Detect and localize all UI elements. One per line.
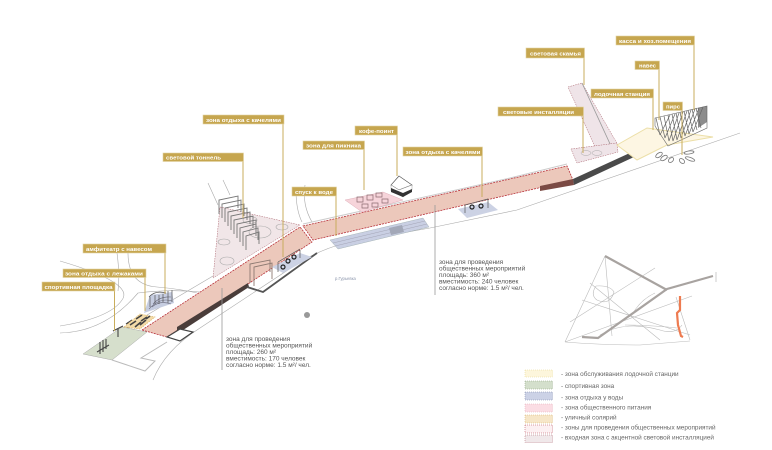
dark walkway to boat station bbox=[540, 152, 634, 191]
legend item: entrance bbox=[525, 434, 714, 442]
label: canopy bbox=[635, 61, 660, 120]
label: coffee point: кофе-поинт bbox=[359, 128, 394, 135]
label: light installations: световые инсталляции bbox=[503, 110, 574, 116]
callout: events zone 360 bbox=[435, 205, 526, 295]
legend item: sports bbox=[525, 381, 615, 390]
zone: solarium with loungers bbox=[124, 314, 155, 329]
label: amphitheatre: амфитеатр с навесом bbox=[86, 246, 152, 253]
callout: events zone 360: площадь: 360 м² bbox=[439, 272, 490, 279]
dark wall with swing platform bbox=[247, 249, 317, 292]
label: descent to water bbox=[292, 187, 336, 236]
upper edge of promenade bbox=[303, 164, 567, 224]
callout: events zone 260: вместимость: 170 человек bbox=[226, 356, 306, 362]
legend item: catering bbox=[525, 404, 652, 412]
icon: canopy and pier structure bbox=[655, 106, 707, 146]
light bench zone bbox=[568, 83, 618, 163]
label: descent to water: спуск к воде bbox=[295, 190, 334, 196]
minimap bbox=[565, 256, 716, 345]
icon: boats bbox=[655, 150, 695, 164]
label: sports ground bbox=[42, 282, 115, 331]
callout: events zone 260: общественных мероприятий bbox=[226, 342, 313, 350]
label: swings left bbox=[203, 115, 284, 257]
label: swings right bbox=[403, 147, 482, 197]
legend bbox=[525, 370, 716, 442]
label: swings right: зона отдыха с качелями bbox=[406, 150, 481, 156]
label: loungers: зона отдыха с лежаками bbox=[65, 272, 143, 278]
legend item: catering: - зона общественного питания bbox=[561, 404, 652, 412]
river label: р.Гурьевка bbox=[335, 276, 357, 281]
icon: coffee point pavilion bbox=[391, 176, 412, 197]
label: light bench bbox=[526, 48, 584, 85]
legend item: events: - зоны для проведения общественных мероприятий bbox=[561, 424, 716, 432]
label: picnic bbox=[303, 141, 364, 190]
legend item: boat station service: - зона обслуживания лодочной станции bbox=[561, 370, 679, 378]
legend item: sports: - спортивная зона bbox=[561, 383, 615, 390]
label: pier: пирс bbox=[666, 104, 681, 110]
callout: events zone 360: общественных мероприятий bbox=[439, 264, 526, 272]
label: sports ground: спортивная площадка bbox=[44, 285, 113, 291]
callout: events zone 260: согласно норме: 1.5 м²/ чел. bbox=[226, 362, 311, 369]
label: light tunnel bbox=[163, 153, 244, 218]
label: light tunnel: световой тоннель bbox=[166, 154, 221, 162]
label: swings left: зона отдыха с качелями bbox=[206, 118, 281, 124]
label: ticket office: касса и хоз.помещения bbox=[619, 39, 691, 45]
callout: events zone 360: вместимость: 240 человек bbox=[439, 278, 519, 286]
legend item: solarium: - уличный солярий bbox=[561, 414, 617, 422]
callout: events zone 260: зона для проведения bbox=[226, 336, 291, 343]
callout: events zone 260 bbox=[222, 288, 313, 370]
site context lines bbox=[60, 133, 740, 380]
zone: picnic bbox=[345, 192, 403, 212]
zone: events strip two bbox=[303, 166, 573, 240]
label: coffee point bbox=[355, 126, 398, 176]
label: pier bbox=[663, 102, 682, 155]
icon: tree bbox=[304, 312, 310, 318]
icon: arches on strip bbox=[250, 260, 272, 286]
label: boat station: лодочная станция bbox=[594, 92, 650, 98]
label: boat station bbox=[591, 89, 654, 130]
zone: boat station service bbox=[617, 128, 713, 160]
dark retaining wall one bbox=[167, 283, 249, 341]
legend item: boat station service bbox=[525, 370, 679, 378]
label: ticket office bbox=[616, 36, 694, 110]
swings platform two bbox=[458, 199, 498, 218]
label: light installations bbox=[498, 107, 584, 153]
label: canopy: навес bbox=[639, 64, 657, 70]
legend item: entrance: - входная зона с акцентной световой инсталляцией bbox=[561, 434, 714, 442]
label: amphitheatre bbox=[83, 244, 166, 294]
zone: amphitheatre with canopy bbox=[144, 290, 174, 313]
callout: events zone 360: согласно норме: 1.5 м²/ чел. bbox=[439, 285, 524, 292]
zone: steps down to water bbox=[330, 218, 429, 249]
label: loungers bbox=[63, 269, 146, 311]
zone: sports ground bbox=[83, 320, 147, 360]
icon: light tunnel arches bbox=[219, 196, 259, 250]
label: picnic: зона для пикника bbox=[306, 144, 362, 150]
legend item: water rest bbox=[525, 392, 624, 402]
legend item: events bbox=[525, 424, 716, 433]
callout: events zone 260: площадь: 260 м² bbox=[226, 349, 277, 356]
legend item: water rest: - зона отдыха у воды bbox=[561, 394, 624, 402]
label: light bench: световая скамья bbox=[530, 51, 581, 57]
zone: light tunnel area bbox=[213, 207, 300, 278]
callout: events zone 360: зона для проведения bbox=[439, 259, 504, 266]
legend item: solarium bbox=[525, 414, 617, 423]
zone: events strip one bbox=[142, 227, 312, 337]
